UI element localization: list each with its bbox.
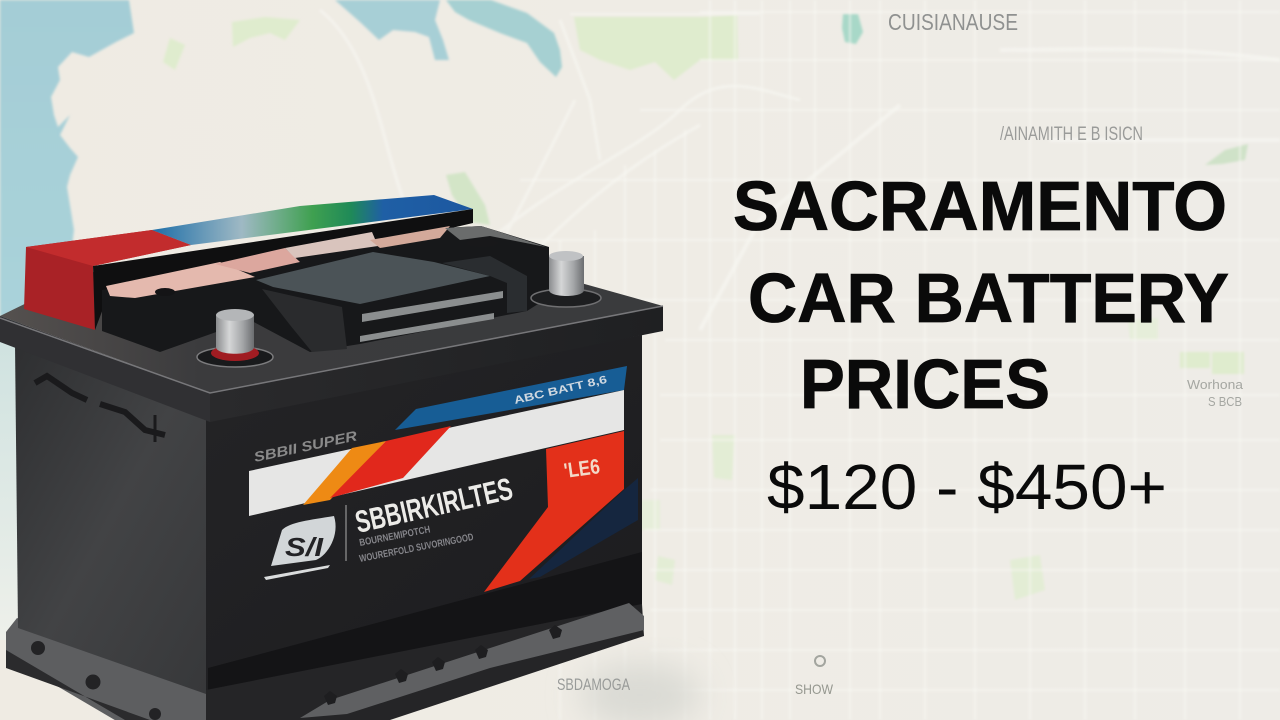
lid left edge — [0, 316, 210, 422]
title line 3: PRICES — [800, 345, 1050, 423]
centre cover front — [102, 226, 549, 352]
pink warning labels — [106, 262, 255, 298]
map label: east towns: Worhona — [1187, 377, 1244, 392]
title line 2: CAR BATTERY — [748, 259, 1229, 337]
red panel — [484, 431, 624, 592]
grey centre plate — [256, 252, 490, 304]
divider — [345, 505, 347, 561]
map label: south: SBDAMOGA — [557, 675, 630, 694]
left base flange — [6, 618, 210, 720]
red panel text: 'LE6 — [562, 455, 601, 483]
map: streets — [320, 0, 1280, 720]
map: pale lower-left shore — [0, 340, 30, 640]
negative terminal — [531, 251, 601, 307]
lid top surface — [0, 272, 663, 393]
ground shadow — [580, 663, 700, 720]
map pin and south-east label: SHOW — [795, 681, 834, 697]
orange stripe — [303, 441, 386, 505]
battery — [0, 195, 663, 720]
map: ocean — [0, 0, 134, 345]
lid — [0, 272, 663, 422]
map: teal pond — [842, 14, 863, 44]
brand logo: S/I — [285, 532, 324, 562]
brand sub text: WOURERFOLD SUVORINGOOD — [358, 532, 474, 565]
red end block — [24, 230, 191, 330]
map label: east towns: S BCB — [1208, 394, 1242, 409]
lid front edge — [210, 306, 663, 422]
map label: east towns — [1187, 377, 1244, 409]
top small text: SBBII SUPER — [252, 427, 359, 465]
black front of raised strip — [93, 209, 473, 330]
brand logo — [264, 516, 336, 580]
map: river lake — [446, 0, 562, 77]
blue band — [395, 366, 627, 430]
blue band text: ABC BATT 8,6 — [513, 374, 608, 407]
front label — [249, 366, 638, 592]
map pin and south-east label — [795, 656, 834, 697]
centre cover — [102, 226, 549, 352]
title — [733, 167, 1229, 423]
body right face — [206, 335, 642, 692]
cap plate — [445, 226, 546, 247]
brand name: SBBIRKIRLTES — [352, 471, 516, 540]
lower band — [208, 552, 642, 692]
map label: top city: CUISIANAUSE — [888, 9, 1018, 35]
coloured top stripe — [152, 195, 473, 245]
right base flange — [300, 603, 644, 718]
red stripe — [330, 426, 451, 498]
brand sub text: BOURNEMIPOTCH — [358, 524, 431, 549]
positive terminal — [197, 309, 273, 367]
price range: $120 - $450+ — [767, 451, 1167, 523]
map label: mid region: /AINAMITH E B ISICN — [1000, 124, 1143, 145]
map: bay — [335, 0, 449, 60]
white band — [249, 390, 624, 516]
side handle clips — [35, 376, 165, 442]
navy diagonal — [529, 478, 638, 579]
map: green parks — [163, 15, 1248, 600]
body foot — [206, 604, 644, 720]
body left face — [15, 344, 206, 694]
title line 1: SACRAMENTO — [733, 167, 1227, 245]
